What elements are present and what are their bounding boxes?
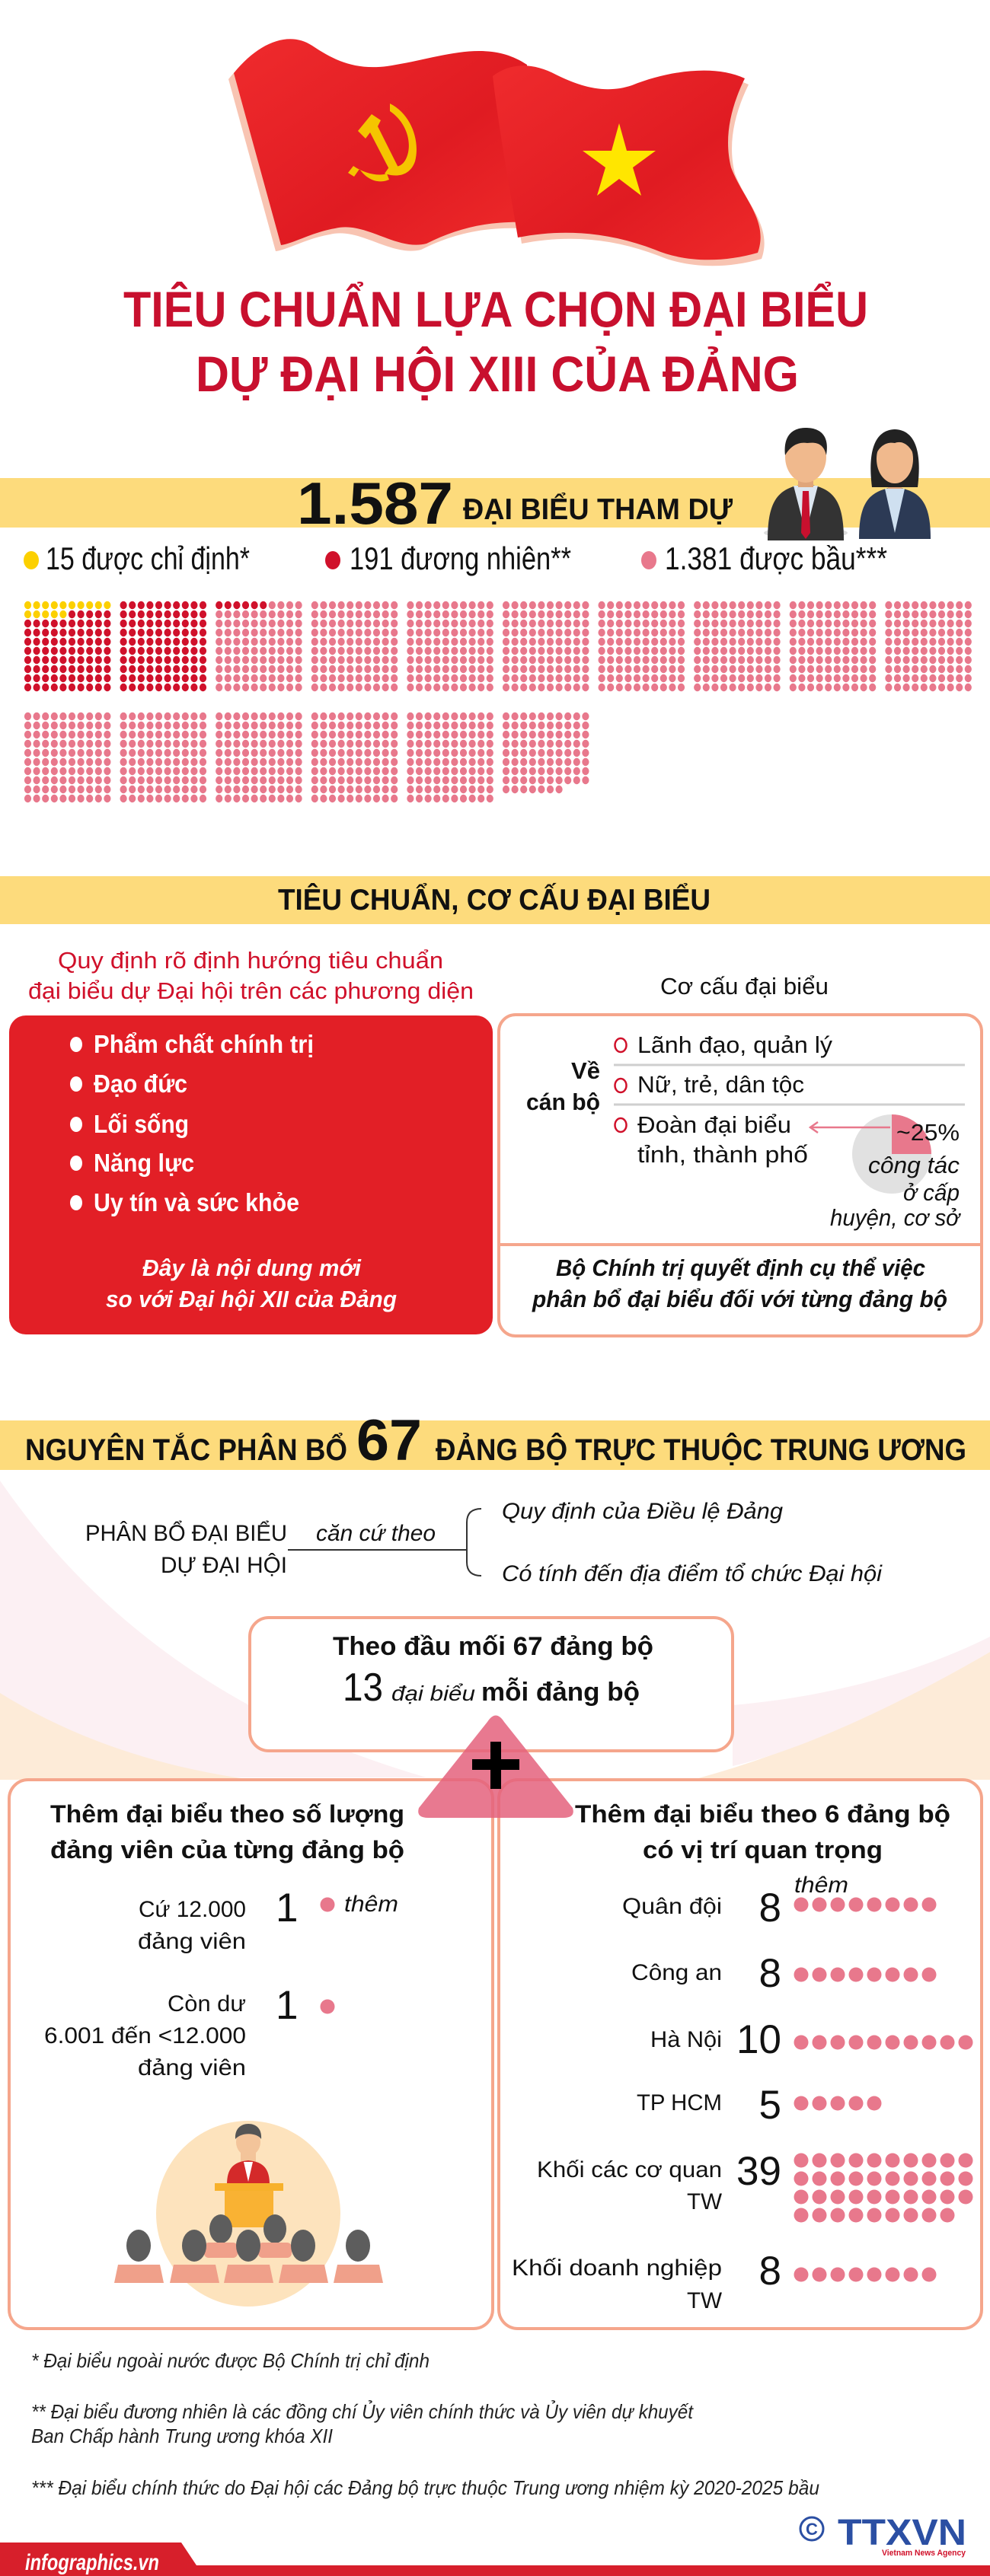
panel: extra for 6 key party committees: TW bbox=[687, 2288, 723, 2313]
panel: delegate structure: huyện, cơ sở bbox=[830, 1204, 961, 1231]
text: standards intro: đại biểu dự Đại hội trên các phương diện bbox=[28, 977, 474, 1004]
panel: delegate structure: tỉnh, thành phố bbox=[637, 1141, 808, 1168]
panel: extra by member count: Cứ 12.000 bbox=[139, 1897, 246, 1922]
title: DỰ ĐẠI HỘI XIII CỦA ĐẢNG bbox=[196, 346, 799, 402]
panel: extra for 6 key party committees: 8 bbox=[759, 1951, 781, 1996]
panel: extra by member count: 1 bbox=[276, 1886, 298, 1930]
panel: extra for 6 key party committees: Hà Nội bbox=[650, 2027, 722, 2052]
legend: 1.381 được bầu*** bbox=[665, 540, 887, 576]
band: allocation principle heading: NGUYÊN TẮC PHÂN BỔ bbox=[25, 1431, 347, 1467]
box: base allocation 13 per party committee: mỗi đảng bộ bbox=[481, 1678, 640, 1707]
panel: extra for 6 key party committees: 8 bbox=[759, 2249, 781, 2294]
panel: extra for 6 key party committees: có vị trí quan trọng bbox=[643, 1836, 883, 1863]
legend bbox=[24, 540, 887, 576]
pie chart: 25% bbox=[852, 1114, 931, 1194]
diagram: allocation basis: PHÂN BỔ ĐẠI BIỂU bbox=[85, 1520, 287, 1546]
box: base allocation 13 per party committee: 13 bbox=[343, 1666, 383, 1710]
icon: yellow star bbox=[583, 123, 656, 196]
diagram: allocation basis bbox=[85, 1499, 883, 1586]
dot chart: 1587 delegates bbox=[24, 601, 972, 802]
legend: 15 được chỉ định* bbox=[46, 540, 250, 576]
panel: extra for 6 key party committees: TW bbox=[687, 2189, 723, 2214]
panel: extra by member count: đảng viên bbox=[138, 2055, 246, 2080]
panel: extra by member count: đảng viên của từng đảng bộ bbox=[50, 1836, 404, 1863]
panel: extra by member count: Còn dư bbox=[168, 1991, 246, 2016]
logo: TTXVN: Vietnam News Agency bbox=[882, 2549, 966, 2558]
panel: delegate structure bbox=[499, 1015, 982, 1336]
panel: extra by member count: Thêm đại biểu theo số lượng bbox=[50, 1800, 404, 1828]
panel: extra for 6 key party committees: TP HCM bbox=[637, 2090, 722, 2115]
logo: TTXVN bbox=[800, 2513, 966, 2558]
panel: delegate structure: Đoàn đại biểu bbox=[637, 1111, 791, 1138]
panel: standards list: Đạo đức bbox=[94, 1070, 187, 1098]
text: standards intro: Quy định rõ định hướng tiêu chuẩn bbox=[58, 947, 443, 974]
icon: hammer and sickle bbox=[348, 104, 417, 181]
band: standards heading: TIÊU CHUẨN, CƠ CẤU ĐẠI BIỂU bbox=[278, 882, 711, 917]
panel: extra by member count: 6.001 đến <12.000 bbox=[44, 2023, 246, 2048]
text: structure label: Cơ cấu đại biểu bbox=[660, 973, 829, 999]
panel: delegate structure: Nữ, trẻ, dân tộc bbox=[637, 1071, 804, 1098]
panel: extra for 6 key party committees: 5 bbox=[759, 2083, 781, 2128]
panel: extra for 6 key party committees bbox=[499, 1780, 982, 2329]
footer bar bbox=[0, 2543, 990, 2576]
panel: extra by member count bbox=[9, 1780, 493, 2329]
icon: delegates man and woman bbox=[764, 428, 931, 540]
icon: plus sign bbox=[472, 1742, 519, 1789]
diagram: allocation basis: Có tính đến địa điểm tổ chức Đại hội bbox=[502, 1561, 883, 1586]
band: 1.587 delegates: 1.587 bbox=[297, 470, 453, 537]
panel: extra for 6 key party committees: 39 bbox=[736, 2149, 781, 2194]
box: base allocation 13 per party committee: Theo đầu mối 67 đảng bộ bbox=[333, 1632, 653, 1661]
panel: extra for 6 key party committees: 10 bbox=[736, 2017, 781, 2062]
band: 1.587 delegates bbox=[0, 470, 990, 537]
panel: extra by member count: đảng viên bbox=[138, 1929, 246, 1954]
panel: standards list: Phẩm chất chính trị bbox=[94, 1030, 314, 1058]
band: allocation principle heading bbox=[0, 1408, 990, 1473]
footnotes: Ban Chấp hành Trung ương khóa XII bbox=[31, 2425, 333, 2447]
panel: delegate structure: Lãnh đạo, quản lý bbox=[637, 1031, 833, 1058]
panel: delegate structure: ~25% bbox=[896, 1119, 960, 1146]
title: TIÊU CHUẨN LỰA CHỌN ĐẠI BIỂU bbox=[123, 281, 868, 337]
panel: extra for 6 key party committees: Thêm đại biểu theo 6 đảng bộ bbox=[575, 1800, 950, 1828]
diagram: allocation basis: căn cứ theo bbox=[316, 1521, 436, 1546]
diagram: allocation basis: Quy định của Điều lệ Đảng bbox=[502, 1499, 783, 1524]
logo: TTXVN: TTXVN bbox=[838, 2513, 966, 2553]
connector: pink triangle bbox=[418, 1716, 573, 1818]
title bbox=[123, 281, 868, 402]
band: standards heading bbox=[0, 876, 990, 924]
panel: standards list: Năng lực bbox=[94, 1149, 194, 1177]
panel: delegate structure: cán bộ bbox=[526, 1089, 600, 1115]
panel: delegate structure: Bộ Chính trị quyết định cụ thể việc bbox=[556, 1255, 925, 1281]
panel: extra for 6 key party committees: Quân đội bbox=[622, 1894, 722, 1919]
band: allocation principle heading: 67 bbox=[356, 1408, 422, 1473]
footnotes bbox=[31, 2349, 819, 2499]
panel: extra for 6 key party committees: Khối các cơ quan bbox=[537, 2157, 722, 2182]
panel: extra for 6 key party committees: 8 bbox=[759, 1886, 781, 1930]
illustration: congress speaker and audience bbox=[114, 2121, 383, 2307]
header flags bbox=[228, 39, 765, 266]
arrow bbox=[810, 1122, 890, 1133]
panel: delegate structure: ở cấp bbox=[903, 1179, 960, 1206]
band: 1.587 delegates: ĐẠI BIỂU THAM DỰ bbox=[463, 492, 733, 526]
footnotes: *** Đại biểu chính thức do Đại hội các Đảng bộ trực thuộc Trung ương nhiệm kỳ 2020-2025 bầu bbox=[31, 2476, 819, 2499]
footnotes: ** Đại biểu đương nhiên là các đồng chí Ủy viên chính thức và Ủy viên dự khuyết bbox=[31, 2399, 695, 2423]
panel: extra for 6 key party committees: Khối doanh nghiệp bbox=[512, 2256, 722, 2281]
panel: delegate structure: Về bbox=[571, 1057, 600, 1084]
footer bar: infographics.vn bbox=[25, 2550, 159, 2575]
panel: standards list: Lối sống bbox=[94, 1110, 189, 1138]
panel: extra for 6 key party committees: Công an bbox=[631, 1960, 722, 1985]
panel: standards list: so với Đại hội XII của Đảng bbox=[106, 1286, 397, 1312]
panel: delegate structure: phân bổ đại biểu đối với từng đảng bộ bbox=[532, 1286, 947, 1312]
panel: extra by member count: thêm bbox=[344, 1892, 398, 1917]
legend: 191 đương nhiên** bbox=[350, 540, 571, 576]
background decorative arcs bbox=[0, 1481, 990, 1780]
panel: delegate structure: công tác bbox=[868, 1152, 960, 1178]
panel: extra for 6 key party committees: thêm bbox=[794, 1873, 848, 1898]
box: base allocation 13 per party committee bbox=[250, 1618, 733, 1751]
panel: standards list: Đây là nội dung mới bbox=[142, 1255, 362, 1281]
box: base allocation 13 per party committee: đại biểu bbox=[391, 1682, 475, 1705]
panel: standards list: Uy tín và sức khỏe bbox=[94, 1188, 299, 1216]
diagram: allocation basis: DỰ ĐẠI HỘI bbox=[161, 1552, 287, 1578]
footnotes: * Đại biểu ngoài nước được Bộ Chính trị chỉ định bbox=[31, 2349, 430, 2372]
text: standards intro bbox=[28, 947, 474, 1004]
panel: standards list bbox=[9, 1015, 493, 1334]
logo: TTXVN: C bbox=[806, 2520, 818, 2539]
panel: extra by member count: 1 bbox=[276, 1983, 298, 2028]
